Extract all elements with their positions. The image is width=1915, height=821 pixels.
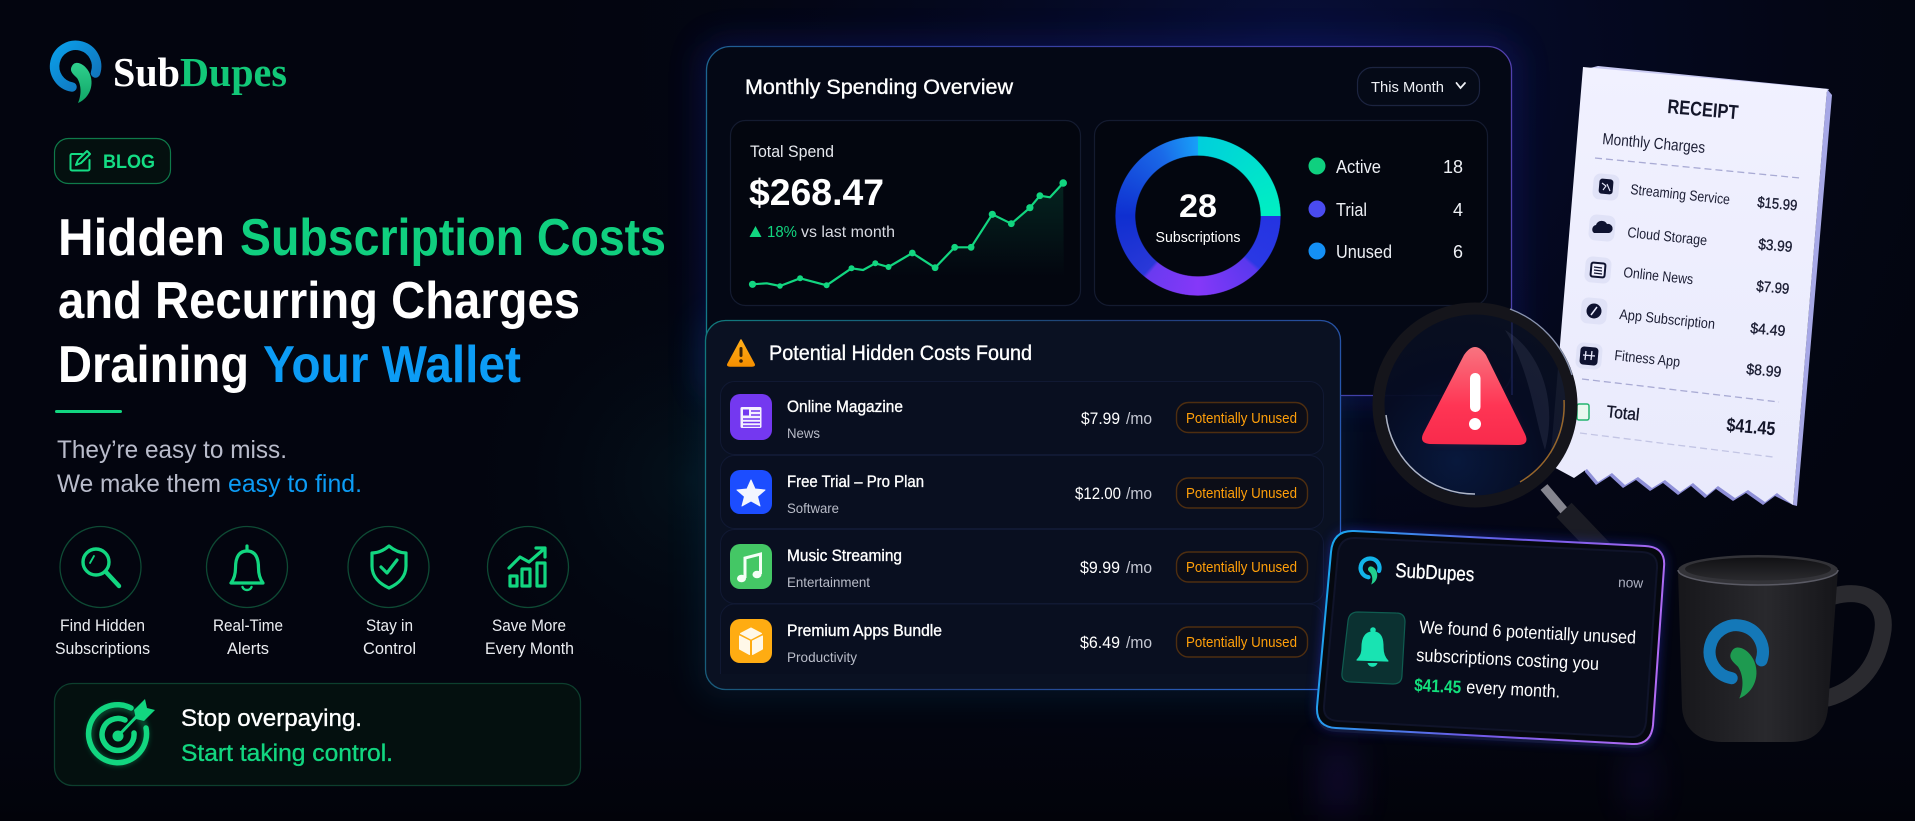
receipt line: online news: $7.99 — [1756, 278, 1790, 298]
row: online magazine: $7.99 — [1081, 409, 1120, 428]
row: online magazine: News — [787, 425, 820, 441]
feature: stay in control: Stay in — [366, 616, 413, 635]
receipt line: streaming service: Streaming Service — [1630, 182, 1731, 208]
icon: magnifier — [83, 549, 119, 586]
mug rim — [1678, 555, 1838, 585]
receipt line: app subscription: App Subscription — [1619, 307, 1716, 333]
icon: edit note — [70, 151, 90, 170]
glow behind dashboard — [698, 40, 1518, 698]
icon: small logo — [1361, 558, 1380, 584]
receipt line: fitness app — [1575, 342, 1782, 381]
notification time: now — [1618, 574, 1644, 591]
donut chart — [1115, 136, 1281, 296]
call to action panel — [54, 684, 580, 786]
feature: save more every month: Every Month — [485, 639, 574, 658]
icon: target with arrow — [89, 699, 155, 763]
row: free trial: Potentially Unused — [1186, 486, 1297, 502]
tagline: We make them — [57, 470, 221, 498]
notification message: every month. — [1466, 677, 1561, 702]
notification sender: SubDupes — [1395, 560, 1475, 586]
feature: find hidden subscriptions: Find Hidden — [60, 616, 145, 635]
receipt — [1550, 66, 1832, 506]
donut centre value: Subscriptions — [1156, 229, 1240, 246]
title: and Recurring Charges — [58, 272, 580, 330]
feature: real-time alerts: Alerts — [227, 639, 269, 658]
receipt total — [1577, 402, 1777, 440]
row: online magazine — [720, 382, 1324, 454]
receipt line: fitness app: Fitness App — [1614, 348, 1681, 371]
card: total spend: Total Spend — [750, 142, 834, 161]
dropdown: this month: This Month — [1371, 79, 1444, 96]
receipt line: app subscription — [1580, 297, 1786, 340]
title: Hidden — [58, 209, 225, 267]
brand logo — [55, 45, 287, 103]
notification message: We found 6 potentially unused — [1419, 617, 1637, 648]
row: free trial: /mo — [1126, 484, 1152, 503]
legend: Unused — [1336, 242, 1392, 262]
magnifier handle — [1544, 487, 1604, 552]
receipt line: streaming service: $15.99 — [1757, 194, 1798, 214]
feature: find hidden subscriptions: Subscriptions — [55, 639, 150, 658]
title — [58, 209, 666, 394]
legend: 4 — [1453, 200, 1463, 220]
icon: red alert triangle — [1422, 347, 1526, 445]
donut centre value — [1156, 188, 1240, 246]
row: premium apps bundle — [720, 604, 1323, 674]
icon: logo mark — [55, 45, 97, 103]
receipt line: online news: Online News — [1623, 265, 1694, 288]
row: free trial: Software — [787, 500, 839, 516]
receipt total: Total — [1606, 402, 1640, 424]
row: premium apps bundle: Productivity — [787, 649, 857, 665]
panel: monthly spending overview — [706, 46, 1512, 396]
receipt heading: RECEIPT — [1667, 96, 1739, 124]
row: music streaming: Entertainment — [787, 574, 870, 590]
icon: magazine — [730, 394, 772, 440]
feature: find hidden subscriptions — [55, 526, 150, 658]
receipt subheading: Monthly Charges — [1602, 131, 1706, 157]
icon: music note — [730, 544, 772, 589]
receipt line: cloud storage — [1588, 214, 1793, 256]
icon: box — [730, 619, 772, 663]
receipt line: cloud storage: $3.99 — [1758, 236, 1793, 256]
icon: star — [730, 470, 772, 514]
magnifier lens — [1381, 311, 1569, 499]
mug body — [1678, 570, 1838, 742]
card: total spend: $268.47 — [749, 172, 884, 213]
mug logo — [1710, 625, 1763, 698]
row: music streaming: Potentially Unused — [1186, 560, 1297, 576]
feature: save more every month: Save More — [492, 616, 566, 635]
row: music streaming: $9.99 — [1080, 558, 1120, 577]
icon: shield check — [372, 546, 406, 588]
call to action panel: Start taking control. — [181, 740, 393, 767]
donut centre value: 28 — [1179, 188, 1217, 224]
receipt line: cloud storage: Cloud Storage — [1627, 225, 1708, 249]
receipt line: fitness app: $8.99 — [1746, 361, 1782, 381]
title: Draining — [58, 336, 249, 394]
tagline: easy to find. — [228, 470, 362, 498]
row: premium apps bundle: Potentially Unused — [1186, 635, 1297, 651]
feature: real-time alerts: Real-Time — [213, 616, 283, 635]
notification message: $41.45 — [1414, 675, 1462, 697]
row: premium apps bundle: $6.49 — [1080, 633, 1120, 652]
card: subscription breakdown — [1094, 120, 1488, 306]
row: online magazine: Online Magazine — [787, 398, 903, 416]
row: music streaming: /mo — [1126, 558, 1152, 577]
icon: warning triangle — [728, 340, 754, 366]
feature: save more every month — [485, 526, 574, 658]
coffee mug — [1678, 555, 1883, 742]
mug handle — [1828, 594, 1883, 698]
receipt line: streaming service — [1592, 173, 1798, 214]
feature: stay in control — [348, 526, 429, 658]
legend: 18 — [1443, 157, 1463, 177]
card: total spend — [730, 120, 1080, 306]
row: premium apps bundle: Premium Apps Bundle — [787, 622, 942, 640]
row: online magazine: /mo — [1126, 409, 1152, 428]
magnifier rim — [1378, 308, 1572, 502]
blog badge — [54, 138, 170, 184]
feature: stay in control: Control — [363, 639, 416, 658]
receipt line: app subscription: $4.49 — [1750, 320, 1786, 340]
panel heading: Monthly Spending Overview — [745, 76, 1014, 99]
row: music streaming: Music Streaming — [787, 547, 902, 565]
icon: bell — [231, 546, 263, 590]
receipt total: $41.45 — [1726, 415, 1777, 440]
tagline — [57, 436, 362, 498]
tagline: They’re easy to miss. — [57, 436, 287, 464]
icon: notification bell — [1342, 612, 1405, 684]
magnifying glass — [1378, 308, 1604, 552]
cta text: Stop overpaying. — [181, 705, 362, 732]
receipt line: online news — [1584, 256, 1790, 298]
panel: potential hidden costs — [706, 320, 1340, 690]
panel heading: Potential Hidden Costs Found — [769, 342, 1032, 365]
row: free trial: $12.00 — [1075, 484, 1121, 503]
badge label: BLOG — [103, 152, 155, 173]
notification card — [1317, 531, 1664, 748]
card: total spend: vs last month — [801, 224, 895, 241]
legend: Active — [1336, 157, 1381, 177]
row: premium apps bundle: /mo — [1126, 633, 1152, 652]
title: Your Wallet — [263, 336, 521, 394]
feature: real-time alerts — [206, 526, 288, 658]
notification message — [1414, 617, 1637, 702]
logo wordmark: SubDupes — [113, 49, 287, 95]
title: Subscription Costs — [240, 209, 666, 267]
legend: 6 — [1453, 242, 1463, 262]
icon: growth chart — [509, 548, 545, 586]
row: online magazine: Potentially Unused — [1186, 411, 1297, 427]
legend — [1308, 157, 1463, 262]
row: music streaming — [720, 530, 1324, 604]
row: free trial: Free Trial – Pro Plan — [787, 473, 924, 491]
legend: Trial — [1336, 200, 1367, 220]
line chart: spending trend — [749, 179, 1067, 300]
row: free trial — [720, 456, 1324, 528]
dropdown: this month — [1358, 68, 1480, 106]
notification message: subscriptions costing you — [1416, 645, 1600, 674]
card: total spend: 18% — [767, 224, 797, 241]
